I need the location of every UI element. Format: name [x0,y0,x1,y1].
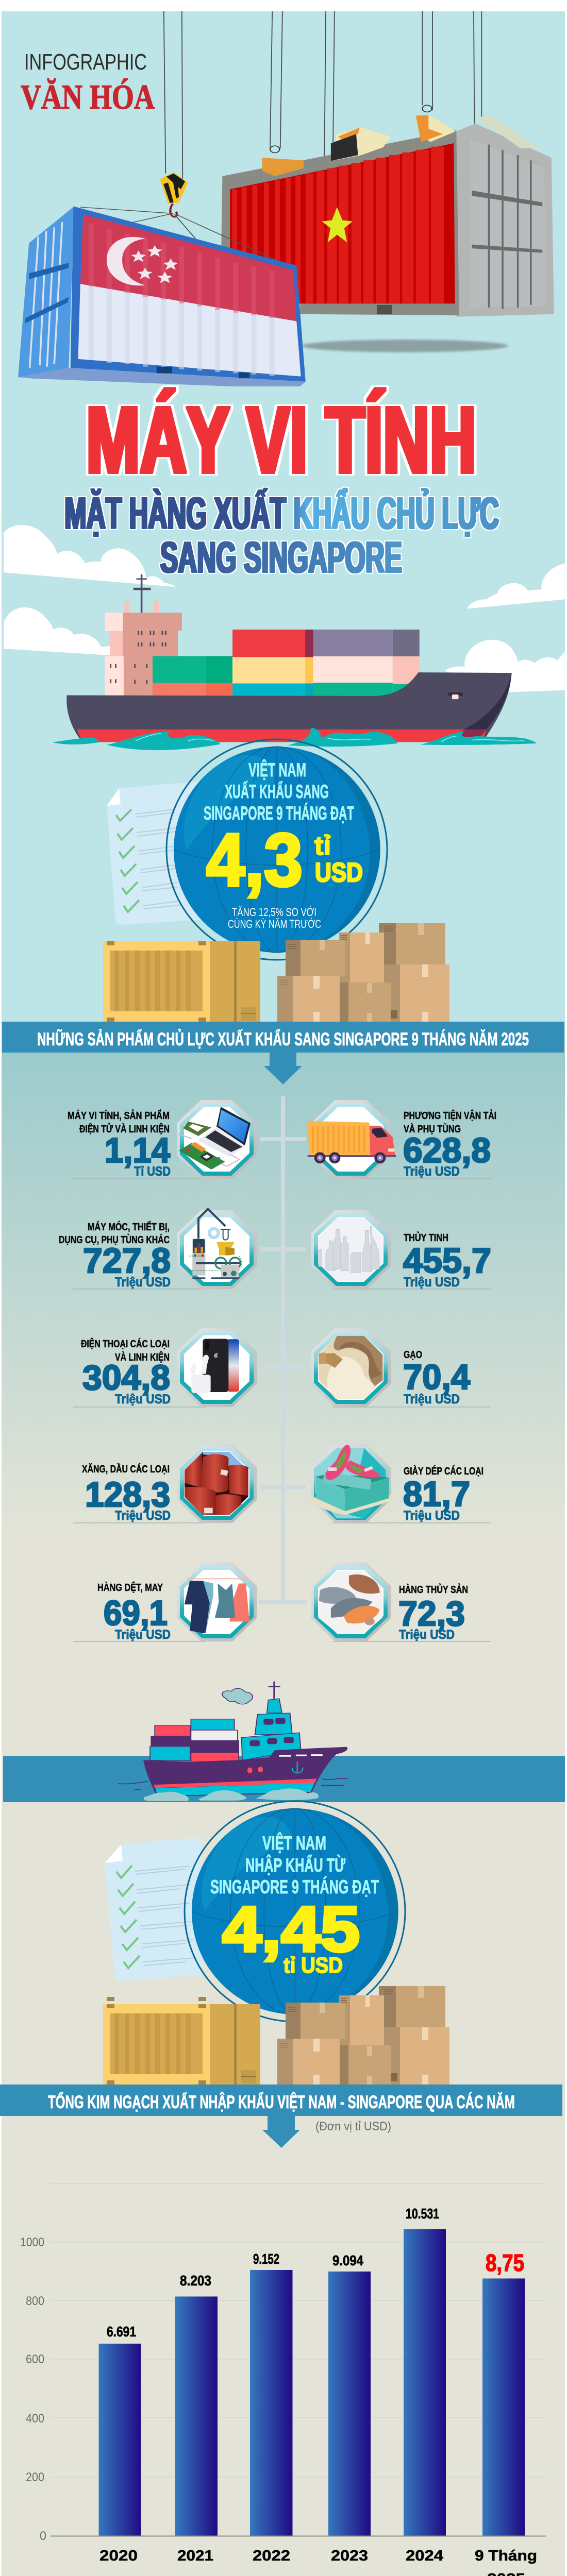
item: vehicles: 628,8 [403,1131,491,1170]
x axis labels: 2021 [177,2548,213,2564]
x axis labels: 2024 [406,2548,443,2564]
item: footwear: Triệu USD [404,1509,460,1523]
illustration: containers hanging from cranes [18,11,554,386]
item: machinery: MÁY MÓC, THIẾT BỊ, [88,1221,170,1233]
bars [99,2229,525,2536]
item: seafood [311,1563,468,1642]
item: fuel: 128,3 [85,1475,170,1514]
item: vehicles [308,1100,496,1179]
container: Vietnam flag [221,105,554,317]
x axis labels [99,2548,537,2576]
globe callout: Vietnam imports: tỉ USD [284,1953,343,1978]
y axis labels: 600 [26,2352,44,2366]
y axis labels: 200 [26,2470,44,2484]
item: computers [68,1100,257,1179]
item: machinery: Triệu USD [115,1275,171,1290]
bar chart: total trade by year [20,2183,546,2576]
globe callout: Vietnam imports: VIỆT NAM [262,1832,326,1854]
row dividers [73,1179,491,1641]
subtitle line 2: SANG SINGAPORE [160,533,402,582]
y axis labels [20,2235,46,2543]
globe callout: Vietnam exports: USD [315,858,363,888]
item: rice [311,1328,470,1407]
logo: Infographic Văn Hóa [21,49,155,116]
item: machinery [59,1209,257,1290]
globe callout: Vietnam exports [166,739,387,960]
item: glass: THỦY TINH [404,1231,448,1244]
item: rice: GẠO [404,1349,422,1361]
item: phones: ĐIỆN THOẠI CÁC LOẠI [81,1337,170,1350]
item: computers: Tỉ USD [134,1164,171,1179]
globe callout: Vietnam imports: 4,45 [222,1894,360,1965]
globe callout: Vietnam exports: VIỆT NAM [248,759,306,781]
item: glass: Triệu USD [404,1275,460,1290]
item: glass [311,1210,491,1290]
clouds [4,525,565,692]
item: rice: Triệu USD [404,1392,460,1406]
item: fuel [82,1444,257,1523]
illustration: small container ship [118,1682,348,1801]
y axis labels: 400 [26,2412,44,2426]
bar value labels: 9.094 [332,2252,363,2268]
bar value labels: 8,75 [486,2249,524,2276]
item: footwear: 81,7 [403,1475,470,1514]
item: vehicles: VÀ PHỤ TÙNG [404,1123,461,1135]
globe callout: Vietnam exports: 4,3 [206,818,303,902]
section banner: total trade [0,2084,562,2148]
item: seafood: HÀNG THỦY SẢN [399,1583,468,1596]
bar value labels: 6.691 [107,2324,136,2340]
item: phones: Triệu USD [115,1392,171,1406]
y axis labels: 1000 [20,2235,44,2249]
bar value labels: 8.203 [180,2273,211,2289]
item: computers: 1,14 [105,1131,170,1170]
y axis labels: 0 [40,2529,46,2543]
chart unit note: (Đơn vị tỉ USD) [315,2120,391,2133]
item: textiles: 69,1 [104,1594,168,1633]
item: computers: ĐIỆN TỬ VÀ LINH KIỆN [79,1123,170,1135]
globe callout: Vietnam exports: XUẤT KHẨU SANG [225,781,329,802]
item: phones: 304,8 [82,1358,170,1397]
item: computers: MÁY VI TÍNH, SẢN PHẨM [68,1110,170,1122]
item: vehicles: PHƯƠNG TIỆN VẬN TẢI [404,1109,496,1122]
y axis labels: 800 [26,2294,44,2308]
item: fuel: Triệu USD [115,1509,171,1523]
globe callout: Vietnam exports: SINGAPORE 9 THÁNG ĐẠT [204,803,354,824]
illustration: container and boxes [103,1986,449,2084]
item: seafood: 72,3 [398,1594,465,1633]
illustration: cargo ship [53,574,537,750]
item: phones: VÀ LINH KIỆN [115,1351,170,1363]
x axis labels: 9 Tháng [475,2548,537,2564]
bar value labels: 9.152 [253,2251,279,2267]
item: rice: 70,4 [403,1358,470,1397]
item: vehicles: Triệu USD [404,1164,460,1179]
band: sea [3,1756,565,1802]
item: footwear [310,1444,483,1523]
section banner: key export products [2,1022,564,1084]
item: machinery: 727,8 [83,1241,171,1280]
item: footwear: GIÀY DÉP CÁC LOẠI [404,1465,483,1477]
globe callout: Vietnam imports: NHẬP KHẨU TỪ [245,1854,345,1876]
container: Singapore flag [18,207,306,386]
bar value labels [107,2206,524,2340]
x axis labels: 2020 [99,2548,138,2564]
item: machinery: DỤNG CỤ, PHỤ TÙNG KHÁC [59,1233,170,1246]
item: phones [81,1328,257,1407]
item: fuel: XĂNG, DẦU CÁC LOẠI [82,1463,170,1475]
globe callout: Vietnam imports: SINGAPORE 9 THÁNG ĐẠT [210,1876,379,1897]
x axis labels: 2022 [253,2548,290,2564]
globe callout: Vietnam exports: CÙNG KỲ NĂM TRƯỚC [228,918,321,930]
illustration: container and boxes [103,923,449,1022]
bar value labels: 10.531 [406,2206,439,2222]
logo: Infographic Văn Hóa: VĂN HÓA [21,77,155,116]
item: glass: 455,7 [403,1241,491,1280]
globe callout: Vietnam imports [185,1801,405,2022]
item: seafood: Triệu USD [399,1628,455,1642]
illustration: checklist document [107,782,204,925]
illustration: checklist document [105,1838,204,1981]
x axis labels: 2023 [331,2548,368,2564]
logo: Infographic Văn Hóa: INFOGRAPHIC [24,49,147,75]
globe callout: Vietnam exports: tỉ [314,831,331,861]
globe callout: Vietnam exports: TĂNG 12,5% SO VỚI [232,906,316,919]
item: textiles: Triệu USD [115,1628,171,1642]
item: textiles: HÀNG DỆT, MAY [97,1581,163,1594]
timeline spine [259,1096,307,1604]
icon: crane hook [80,172,289,266]
item: textiles [97,1563,257,1642]
